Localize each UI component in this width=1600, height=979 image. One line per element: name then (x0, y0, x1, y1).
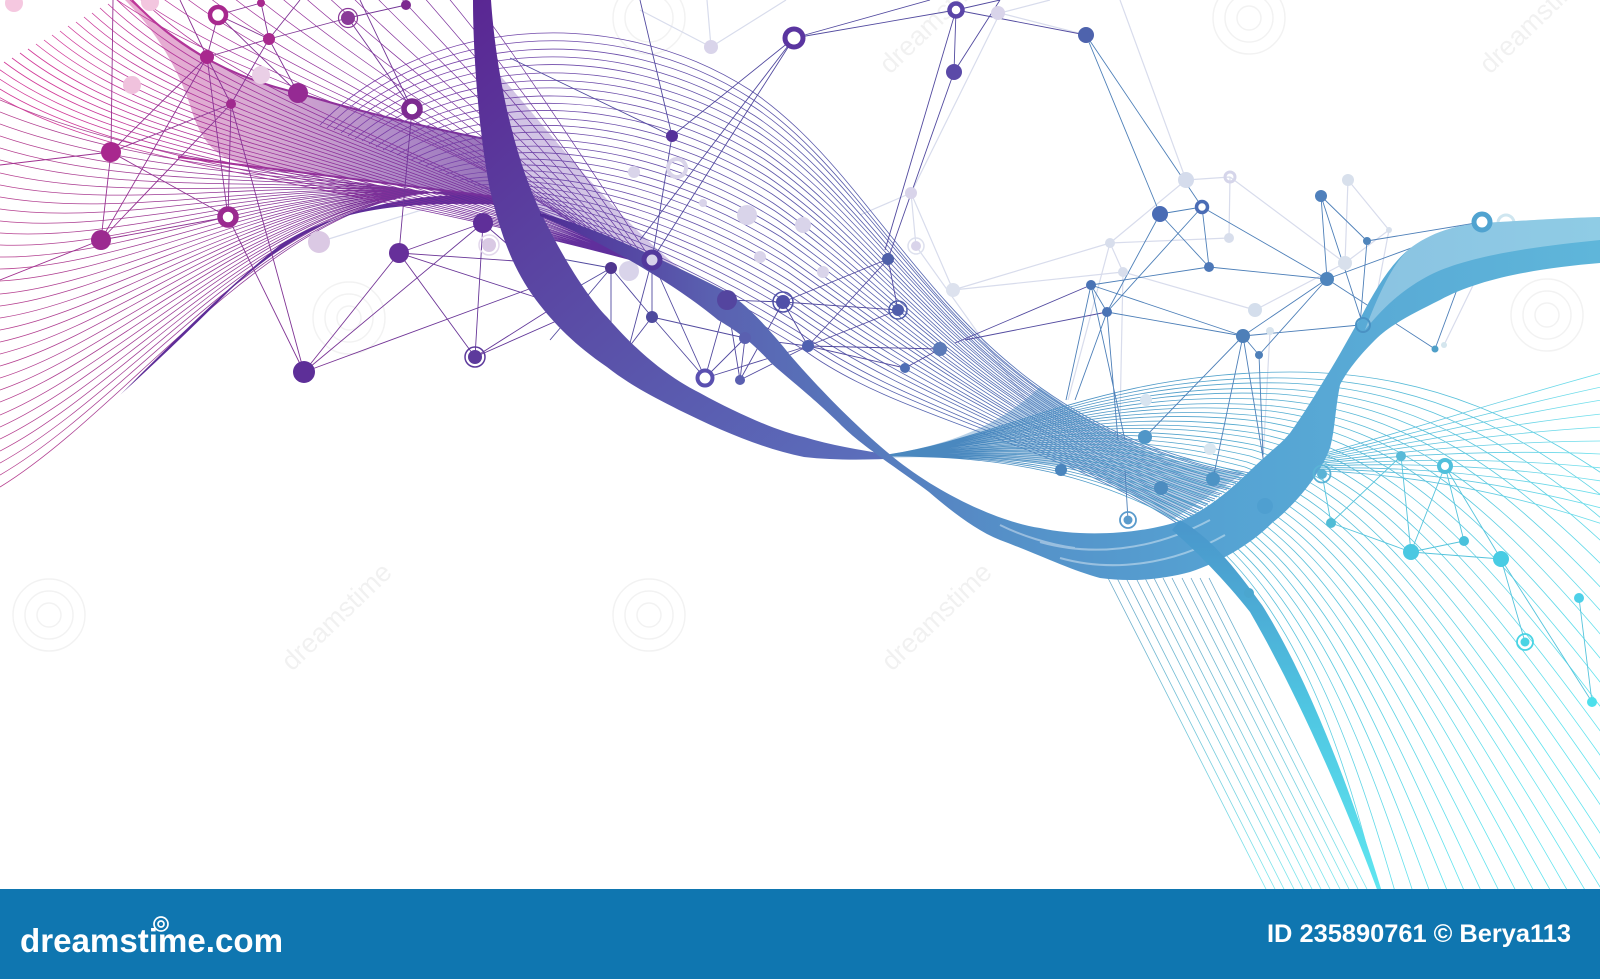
wave: rising fan on the right (1262, 368, 1600, 530)
network links: cyan lower right cluster (1322, 456, 1592, 702)
wave: dark lower edge of left fan (120, 195, 525, 395)
footer logo text: dreamstime.com (20, 922, 283, 959)
ribbon: purple swoop from the top (473, 0, 885, 460)
network links: magenta and purple cluster (0, 0, 570, 372)
wave: crossing lines from the top (110, 0, 665, 280)
wave: cyan streak running to the bottom (1172, 520, 1382, 892)
ribbon highlights: pale streaks (1000, 520, 1225, 565)
ribbon: central lattice underlay (495, 70, 715, 295)
wave: big left fan (0, 100, 520, 487)
watermark text (275, 0, 1596, 676)
wave: straight lines below the ribbon (1108, 578, 1370, 895)
faint background network links (319, 0, 1500, 460)
footer banner (0, 889, 1600, 979)
network links: blue right cluster (1066, 35, 1482, 520)
wave: upper lattice dark edges (132, 0, 528, 201)
icon: logo spiral (154, 917, 168, 931)
ribbon highlight: pale top of the rising band (1365, 217, 1600, 330)
ribbon: upper lattice band underlay (125, 0, 530, 205)
watermark spirals (13, 0, 1583, 651)
ribbon: lower middle lattice underlay (885, 387, 1244, 520)
network links: violet middle cluster (510, 0, 1107, 380)
footer image id and credit: ID 235890761 © Berya113 (1267, 920, 1571, 948)
wave: upper left lattice lines (0, 0, 650, 265)
watermark text: dreamstime (875, 557, 998, 676)
watermark text: dreamstime (275, 557, 398, 676)
wave: lower right arcs (880, 372, 1600, 895)
wave: central hump (320, 33, 1250, 525)
ribbon: long blue S-curve (540, 213, 1600, 580)
faint background nodes (5, 0, 1514, 455)
network nodes: filled and ring markers (91, 0, 1597, 707)
